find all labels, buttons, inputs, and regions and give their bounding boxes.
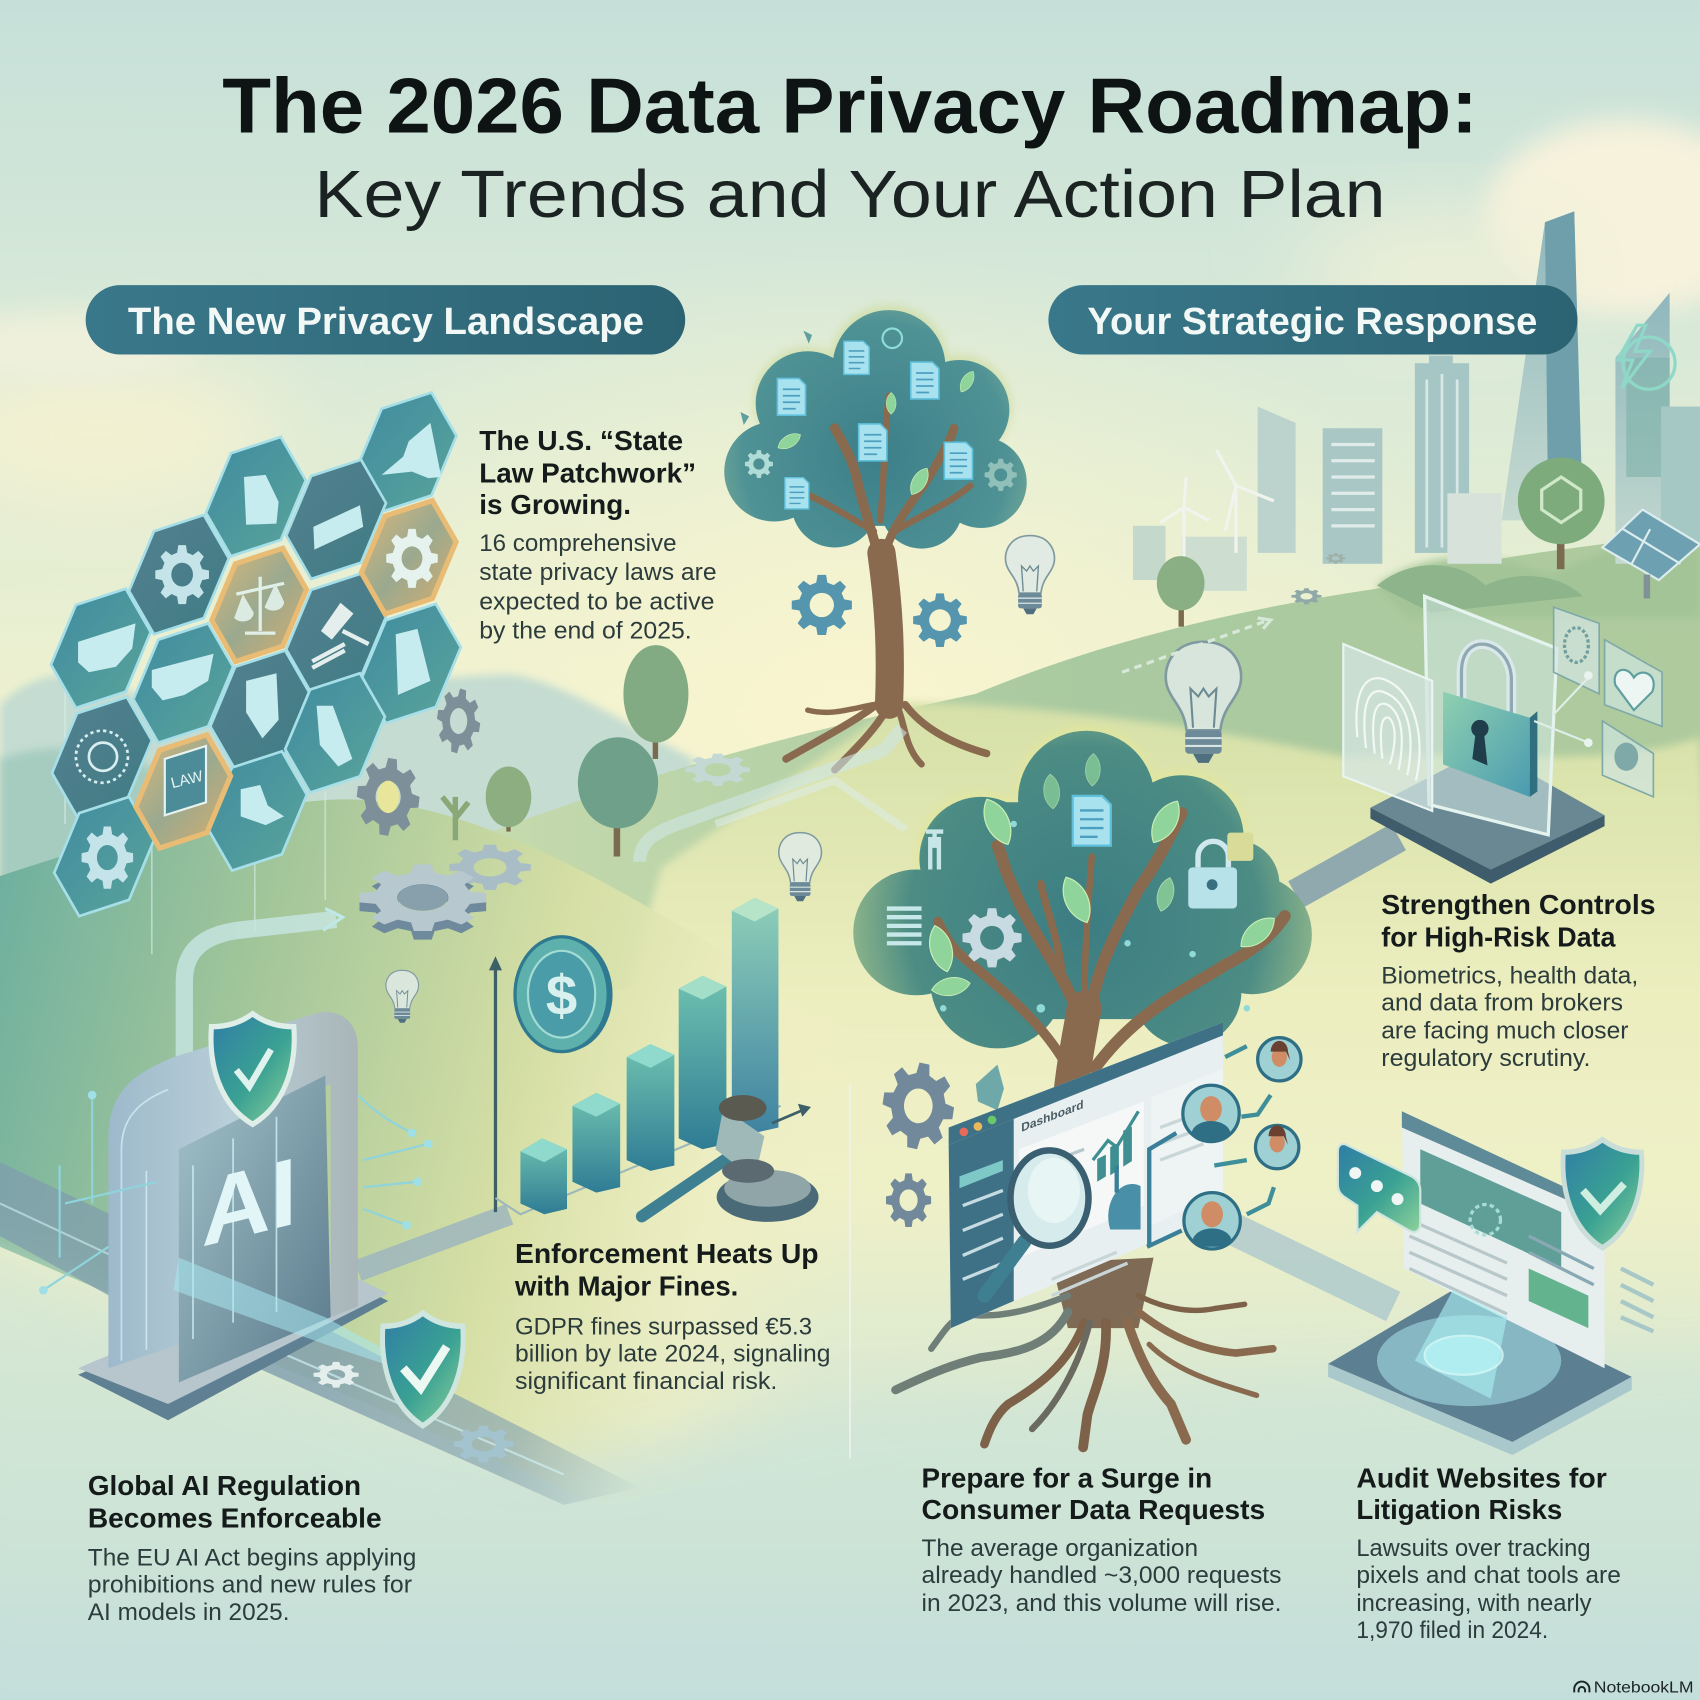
icon: coin [515, 937, 613, 1052]
icon: website shield [1563, 1139, 1642, 1248]
magnifying glass [984, 1150, 1089, 1296]
text block: litigation risks: Audit Websites for [1356, 1461, 1607, 1493]
website audit device [1328, 1111, 1653, 1455]
gears: large pair above chart [360, 845, 531, 940]
dashboard panel: Dashboard [1021, 1097, 1084, 1135]
text block: state law patchwork: state privacy laws are [479, 559, 717, 586]
text block: consumer data requests: in 2023, and this volume will rise. [922, 1590, 1282, 1617]
text block: high-risk data: Biometrics, health data, [1381, 962, 1638, 989]
text block: litigation risks: Lawsuits over tracking [1356, 1535, 1590, 1562]
text block: AI regulation: Becomes Enforceable [88, 1502, 382, 1534]
tree 1 with document icons [724, 305, 1027, 770]
text block: enforcement [514, 1237, 830, 1395]
gears on road [314, 1362, 513, 1462]
title [222, 61, 1478, 232]
text block: high-risk data: and data from brokers [1381, 989, 1623, 1016]
section pill: Your Strategic Response [1048, 285, 1577, 355]
section pill: The New Privacy Landscape [86, 285, 685, 355]
tree 2 roots [896, 1258, 1273, 1447]
lock on glass panels [1343, 596, 1605, 884]
roads and data paths [184, 618, 1399, 1306]
city skyline [1133, 211, 1700, 591]
text block: high-risk data [1381, 888, 1656, 1072]
text block: AI regulation: AI models in 2025. [88, 1599, 289, 1626]
text block: state law patchwork: The U.S. “State [479, 424, 683, 456]
text block: AI regulation: prohibitions and new rules for [88, 1572, 412, 1599]
text block: consumer data requests: The average organization [922, 1535, 1198, 1562]
text block: litigation risks: pixels and chat tools are [1356, 1562, 1621, 1589]
hexagon grid of state laws [51, 392, 461, 954]
text block: high-risk data: regulatory scrutiny. [1381, 1045, 1590, 1072]
text block: enforcement: with Major Fines. [514, 1270, 738, 1302]
AI gate [39, 1012, 455, 1420]
icon: shield on gate [211, 1014, 294, 1124]
tree 2 with data icons [853, 725, 1312, 1128]
text block: AI regulation: The EU AI Act begins applying [88, 1545, 416, 1572]
text block: enforcement: billion by late 2024, signaling [515, 1341, 830, 1368]
title: The 2026 Data Privacy Roadmap: [222, 61, 1478, 149]
road through the AI gate [0, 1162, 640, 1505]
text block: enforcement: GDPR fines surpassed €5.3 [515, 1314, 812, 1341]
icon: gavel [642, 1095, 819, 1222]
icon: coin: $ [546, 964, 577, 1027]
small data cards: fingerprint, heart, organs [1534, 607, 1662, 797]
text block: litigation risks: 1,970 filed in 2024. [1356, 1617, 1548, 1644]
text block: AI regulation: Global AI Regulation [88, 1469, 361, 1501]
icon: shield with check [383, 1313, 463, 1426]
text block: AI regulation [88, 1469, 416, 1626]
text block: high-risk data: Strengthen Controls [1381, 888, 1656, 920]
small trees and loose gears on the left hill [353, 645, 750, 857]
text block: high-risk data: are facing much closer [1381, 1018, 1628, 1045]
text block: enforcement: significant financial risk. [515, 1368, 777, 1395]
text block: state law patchwork: Law Patchwork” [479, 456, 696, 488]
hexagon grid of state laws: LAW [169, 768, 205, 792]
text block: consumer data requests [922, 1462, 1282, 1617]
text block: litigation risks: Litigation Risks [1356, 1493, 1562, 1525]
text block: litigation risks [1356, 1462, 1621, 1644]
text block: consumer data requests: Prepare for a Surge in [922, 1461, 1212, 1493]
text block: litigation risks: increasing, with nearly [1356, 1590, 1592, 1617]
text block: high-risk data: for High-Risk Data [1381, 920, 1616, 952]
icon: light bulbs [386, 536, 1241, 1023]
icon: chat bubble [1338, 1144, 1420, 1232]
user avatars with arrows [1183, 1038, 1301, 1249]
text block: state law patchwork: by the end of 2025. [479, 618, 692, 645]
bar chart of rising fines [489, 898, 781, 1214]
section pill: The New Privacy Landscape: The New Privacy Landscape [128, 301, 644, 343]
dashboard panel [949, 1022, 1223, 1328]
text block: state law patchwork: 16 comprehensive [479, 530, 677, 557]
text block: enforcement: Enforcement Heats Up [515, 1237, 819, 1269]
text block: consumer data requests: already handled ~3,000 requests [922, 1562, 1282, 1589]
text block: state law patchwork: is Growing. [479, 488, 631, 520]
text block: consumer data requests: Consumer Data Requests [922, 1493, 1265, 1525]
NotebookLM watermark: NotebookLM [1594, 1679, 1693, 1696]
title: Key Trends and Your Action Plan [314, 157, 1386, 232]
section pill: Your Strategic Response: Your Strategic Response [1087, 301, 1537, 343]
text block: state law patchwork [479, 424, 717, 645]
AI gate: AI [202, 1136, 297, 1267]
right hillside trees and solar panel [1157, 458, 1700, 627]
gears beside dashboard [877, 1056, 1004, 1227]
text block: state law patchwork: expected to be active [479, 588, 714, 615]
